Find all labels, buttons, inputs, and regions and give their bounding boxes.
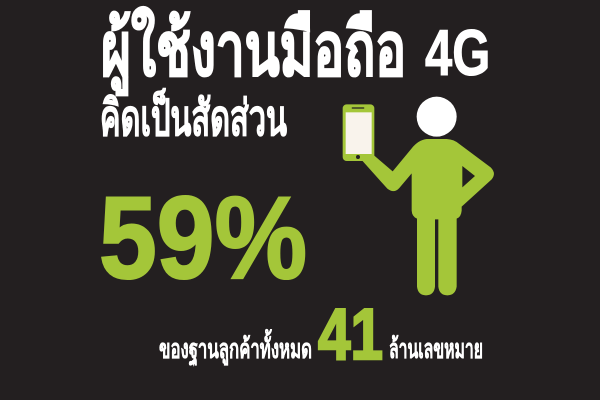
big percentage: 59% <box>99 173 307 304</box>
title: ผู้ใช้งานมือถือ <box>101 6 406 96</box>
title: 4G <box>425 17 490 90</box>
icon: person holding phone <box>343 97 494 295</box>
person body <box>362 139 494 295</box>
caption left: ของฐานลูกค้าทั้งหมด <box>159 329 312 366</box>
caption right: ล้านเลขหมาย <box>389 333 483 364</box>
person head <box>417 97 457 137</box>
phone <box>343 104 374 161</box>
big number 41: 41 <box>318 295 383 375</box>
subtitle: คิดเป็นสัดส่วน <box>100 88 287 146</box>
